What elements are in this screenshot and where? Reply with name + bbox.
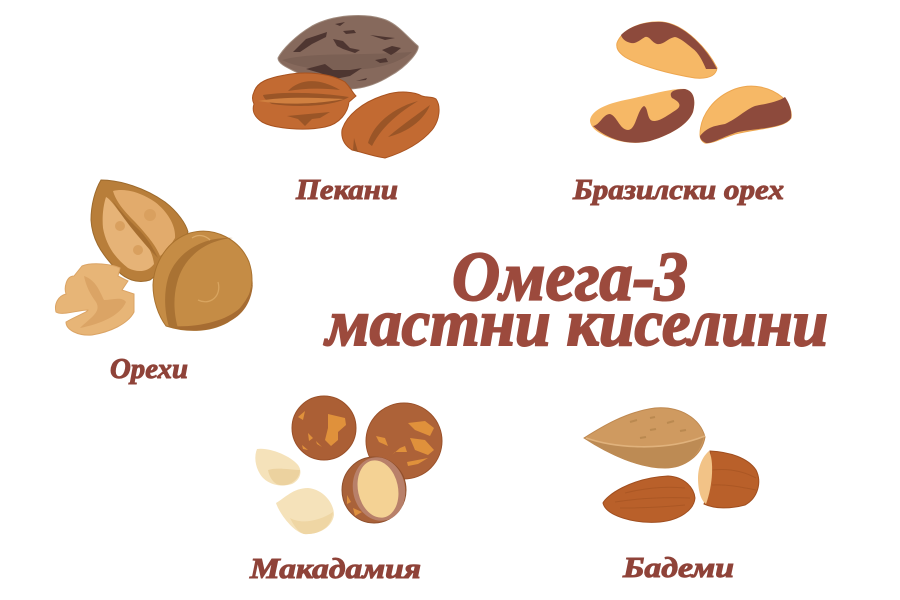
pecan shell — [278, 15, 418, 89]
brazil nut top — [617, 22, 717, 78]
macadamia whole nut one — [292, 396, 356, 460]
illustration: brazil nuts — [590, 22, 791, 143]
walnut kernel piece — [55, 264, 134, 335]
illustration: macadamia — [255, 396, 442, 534]
label: pecans: Пекани — [295, 174, 398, 206]
illustration: pecans — [252, 15, 439, 158]
whole walnut — [153, 231, 253, 330]
almond kernel whole — [603, 476, 695, 522]
label: walnuts: Орехи — [110, 353, 188, 385]
pecan right — [342, 92, 439, 158]
macadamia cracked nut — [342, 452, 411, 526]
illustration: almonds — [584, 408, 759, 522]
illustration: walnuts — [55, 180, 253, 335]
brazil nut right — [700, 86, 791, 143]
label: almonds: Бадеми — [622, 552, 734, 584]
almond kernel cut — [698, 451, 759, 508]
almond in shell — [584, 408, 705, 468]
brazil nut left — [590, 89, 694, 143]
title line one: Омега-3 — [452, 239, 688, 316]
label: macadamia: Макадамия — [249, 553, 421, 585]
label: brazil nut: Бразилски орех — [572, 174, 784, 206]
title — [323, 239, 828, 360]
walnut half shell — [91, 180, 188, 282]
macadamia kernel two — [276, 488, 334, 534]
title line two: мастни киселини — [323, 287, 828, 360]
macadamia whole nut two — [366, 403, 442, 479]
macadamia kernel one — [255, 449, 300, 486]
pecan left — [252, 73, 356, 129]
walnut kernel halves — [113, 190, 175, 256]
